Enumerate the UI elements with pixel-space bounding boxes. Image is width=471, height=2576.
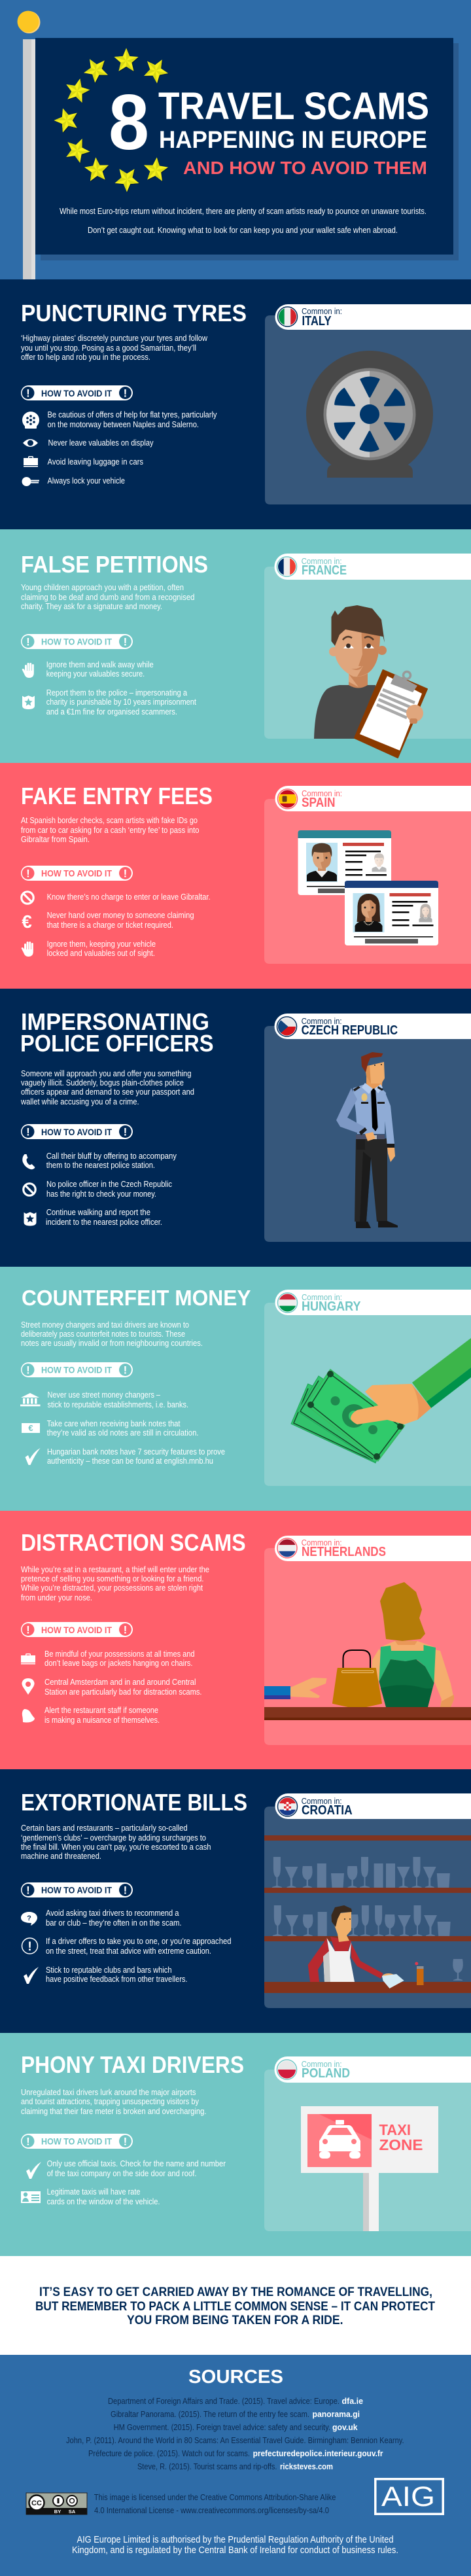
heading: POLICE OFFICERS — [20, 1030, 213, 1057]
creative commons badge: BY — [54, 2509, 61, 2514]
tip: taxi drivers: bar or club – they’re often in on the scam. — [46, 1918, 182, 1928]
tip: security features — [25, 1447, 225, 1466]
tip: caution — [22, 1937, 232, 1956]
description — [21, 816, 200, 844]
tip: report: Report them to the police – impersonating a — [46, 688, 187, 697]
tip: security features: Hungarian bank notes have 7 security features to prove — [47, 1447, 225, 1456]
common in badge: France: FRANCE — [302, 563, 347, 578]
icon: question bubble: ? — [27, 1914, 31, 1922]
description: deliberately pass counterfeit notes to tourists. These — [21, 1330, 185, 1339]
description: Certain bars and restaurants – particularly so-called — [21, 1824, 188, 1833]
common in badge: Netherlands: Common in: — [302, 1538, 342, 1547]
how to avoid it pill: HOW TO AVOID IT — [41, 2136, 112, 2146]
icon: taxi — [319, 2120, 360, 2159]
AIG logo — [375, 2479, 443, 2514]
icon: prohibited — [22, 892, 33, 904]
section background — [0, 529, 471, 763]
common in badge: Poland: Common in: — [302, 2059, 342, 2069]
tip: bank notes: they’re valid as old notes are still in circulation. — [47, 1428, 198, 1438]
tip: ignore — [22, 660, 154, 679]
section background — [0, 989, 471, 1267]
how to avoid it pill: ! — [26, 636, 30, 648]
tip: alert staff: Alert the restaurant staff if someone — [44, 1706, 158, 1715]
illustration: wheel — [306, 351, 433, 478]
tip: no right to check: has the right to check your money. — [46, 1190, 156, 1199]
section: counterfeit money — [0, 1267, 471, 1511]
common in badge: Spain — [275, 786, 471, 811]
heading: COUNTERFEIT MONEY — [22, 1286, 251, 1310]
closing message: BUT REMEMBER TO PACK A LITTLE COMMON SENSE – IT CAN PROTECT — [35, 2300, 435, 2314]
common in badge: Poland — [275, 2056, 471, 2083]
how to avoid it pill: ! — [124, 1884, 127, 1896]
tip: valuables: Never leave valuables on display — [48, 438, 154, 448]
closing message — [35, 2285, 435, 2327]
icon: police badge — [24, 1212, 37, 1226]
tip: call bluff — [22, 1152, 177, 1170]
sources list: John, P. (2011). Around the World in 80 Scams: An Essential Travel Guide. Birmingham: Bennion Kearny. — [66, 2435, 404, 2445]
tip: report: and a €1m fine for organised scammers. — [46, 707, 177, 716]
sources list: ricksteves.com — [280, 2462, 333, 2471]
licence text: This image is licensed under the Creative Commons Attribution-Share Alike — [94, 2492, 336, 2502]
heading: EXTORTIONATE BILLS — [21, 1789, 247, 1816]
illustration: police officer — [336, 1052, 398, 1228]
how to avoid it pill: HOW TO AVOID IT — [41, 1884, 112, 1895]
common in badge: Italy — [275, 304, 471, 330]
description — [21, 1320, 203, 1348]
icon: police badge — [22, 696, 35, 709]
tip: flat tyres: Be cautious of offers of help for flat tyres, particularly — [47, 410, 217, 419]
tip: alert staff — [22, 1706, 160, 1725]
common in badge: Netherlands: NETHERLANDS — [302, 1545, 386, 1559]
tip: official taxis — [26, 2159, 226, 2179]
sources list: Gibraltar Panorama. (2015). The return of the entry fee scam. — [111, 2409, 309, 2419]
licence text — [94, 2492, 336, 2515]
description: While you’re distracted, your possessions are stolen right — [21, 1583, 203, 1593]
tip: location: Station are particularly bad for distraction scams. — [44, 1687, 201, 1697]
illustration panel — [264, 1303, 471, 1486]
tip: no charge: Know there’s no charge to enter or leave Gibraltar. — [47, 892, 211, 902]
heading: PUNCTURING TYRES — [21, 300, 247, 326]
common in badge: Croatia: CROATIA — [302, 1803, 353, 1818]
sources list: HM Government. (2015). Foreign travel advice: safety and security. — [114, 2422, 330, 2432]
icon: check — [24, 1967, 39, 1984]
creative commons badge — [26, 2493, 87, 2514]
icon: prohibited — [24, 1184, 35, 1195]
tip: security features: authenticity – these can be found at english.mnb.hu — [47, 1456, 213, 1466]
common in badge: Netherlands — [275, 1536, 471, 1561]
how to avoid it pill — [21, 385, 133, 400]
flag: Poland — [277, 2060, 297, 2079]
icon: warning circle — [22, 1938, 38, 1954]
how to avoid it pill: ! — [26, 387, 30, 399]
icon: check — [25, 1448, 41, 1465]
tip: possessions — [21, 1650, 195, 1668]
section background — [0, 1267, 471, 1511]
tip: no right to check: No police officer in the Czech Republic — [46, 1180, 172, 1189]
tip: never pay — [22, 911, 194, 932]
description: pretence of selling you something or looking for a friend. — [21, 1574, 204, 1583]
common in badge: Hungary — [275, 1290, 471, 1315]
licence text: 4.0 International License - www.creativecommons.org/licenses/by-sa/4.0 — [94, 2505, 329, 2515]
heading: IMPERSONATING — [21, 1008, 209, 1035]
heading: PHONY TAXI DRIVERS — [21, 2051, 244, 2078]
tip: rate cards: Legitimate taxis will have rate — [47, 2187, 141, 2197]
description: you until you stop. Posing as a good Samaritan, they’ll — [21, 344, 196, 353]
common in badge: Croatia: Common in: — [302, 1796, 342, 1806]
tip: no right to check — [24, 1180, 172, 1199]
sources list: Department of Foreign Affairs and Trade. (2015). Travel advice: Europe. — [108, 2396, 340, 2406]
icon: bell — [22, 1709, 35, 1722]
common in badge: Czech Republic: Common in: — [302, 1016, 342, 1026]
tip: caution: If a driver offers to take you to one, or you’re approached — [46, 1937, 232, 1946]
closing message: YOU FROM BEING TAKEN FOR A RIDE. — [127, 2314, 343, 2327]
tip: lock vehicle — [22, 476, 125, 486]
tip: bank notes — [22, 1419, 199, 1438]
tip: no charge — [22, 892, 211, 904]
sources list: prefecturedepolice.interieur.gouv.fr — [253, 2449, 383, 2458]
flag: Netherlands — [277, 1538, 297, 1558]
tip: taxi drivers: Avoid asking taxi drivers to recommend a — [46, 1909, 179, 1918]
how to avoid it pill — [21, 1622, 133, 1637]
legal text: Kingdom, and is regulated by the Central Bank of Ireland for conduct of business rules. — [72, 2545, 398, 2556]
tip: never pay: that there is a charge or ticket required. — [47, 921, 173, 930]
icon: hand — [21, 942, 33, 957]
tip: banks: Never use street money changers – — [47, 1390, 160, 1400]
illustration: bartender — [264, 1905, 471, 1993]
description: from under your nose. — [21, 1593, 92, 1602]
tip: banks: stick to reputable establishments, i.e. banks. — [47, 1400, 188, 1409]
tip: ignore: locked and valuables out of sight. — [47, 949, 155, 958]
creative commons badge: CC — [31, 2499, 42, 2507]
icon: euro note: € — [28, 1423, 33, 1433]
illustration: taxi zone sign: TAXI — [379, 2121, 411, 2138]
how to avoid it pill: HOW TO AVOID IT — [41, 868, 112, 878]
common in badge: Italy: Common in: — [302, 306, 342, 316]
description: charity. They ask for a signature and money. — [21, 602, 162, 611]
illustration: taxi zone sign — [301, 2106, 438, 2231]
icon: ID card — [21, 2191, 41, 2203]
tip: report: Continue walking and report the — [46, 1208, 150, 1217]
creative commons badge: SA — [69, 2509, 76, 2514]
description: Unregulated taxi drivers lurk around the major airports — [21, 2088, 196, 2097]
common in badge: Italy: ITALY — [302, 314, 332, 328]
icon: eye — [23, 439, 38, 447]
section background — [0, 1769, 471, 2033]
tip: possessions: Be mindful of your possessions at all times and — [44, 1650, 195, 1659]
section background — [0, 1511, 471, 1769]
sources list: gov.uk — [332, 2423, 358, 2432]
flag: Croatia — [277, 1797, 297, 1816]
illustration panel — [264, 799, 471, 964]
tip: ignore: Ignore them and walk away while — [46, 660, 154, 669]
tip: flat tyres — [22, 410, 217, 429]
main title: TRAVEL SCAMS — [158, 85, 429, 128]
icon: briefcase — [24, 456, 38, 467]
how to avoid it pill: ! — [124, 2136, 127, 2147]
sources list: Préfecture de police. (2015). Watch out for scams. — [88, 2448, 250, 2458]
how to avoid it pill — [21, 634, 133, 649]
common in badge: Czech Republic — [275, 1014, 471, 1039]
description: claiming that their fare meter is broken and overcharging. — [21, 2107, 207, 2116]
tip: call bluff: them to the nearest police station. — [46, 1161, 155, 1170]
sources list — [66, 2396, 404, 2471]
how to avoid it pill: ! — [124, 1624, 127, 1636]
section: fake entry fees — [0, 763, 471, 989]
tip: call bluff: Call their bluff by offering to accompany — [46, 1152, 177, 1161]
section background — [0, 279, 471, 529]
header background — [0, 0, 471, 279]
how to avoid it pill — [21, 1124, 133, 1139]
main title — [109, 79, 429, 178]
section background — [0, 2033, 471, 2256]
legal text — [72, 2534, 398, 2556]
how to avoid it pill — [21, 1882, 133, 1897]
illustration panel — [265, 315, 471, 504]
main title: HAPPENING IN EUROPE — [159, 126, 427, 153]
common in badge: Croatia — [275, 1793, 471, 1819]
description: Street money changers and taxi drivers are known to — [21, 1320, 189, 1330]
sources list: panorama.gi — [313, 2410, 360, 2419]
tip: ignore: keeping your valuables secure. — [46, 669, 145, 679]
heading: FALSE PETITIONS — [21, 551, 208, 578]
tip: flat tyres: on the motorway between Naples and Salerno. — [47, 420, 199, 429]
common in badge: France — [275, 554, 471, 580]
description: officers appear and demand to see your passport and — [21, 1087, 194, 1097]
section background — [0, 763, 471, 989]
common in badge: Poland: POLAND — [302, 2066, 350, 2081]
heading — [20, 1008, 213, 1057]
sources heading: SOURCES — [188, 2367, 283, 2388]
description: Gibraltar from Spain. — [21, 835, 90, 844]
tip: never pay: Never hand over money to someone claiming — [47, 911, 194, 920]
how to avoid it pill: ! — [124, 1125, 127, 1138]
icon: euro note — [22, 1423, 40, 1433]
description: At Spanish border checks, scam artists with fake IDs go — [21, 816, 198, 825]
footer panel — [0, 2355, 471, 2576]
how to avoid it pill: ! — [26, 2136, 30, 2147]
description — [20, 1069, 194, 1106]
section: puncturing tyres — [0, 279, 471, 529]
tip: luggage: Avoid leaving luggage in cars — [47, 457, 143, 467]
description: ‘Highway pirates’ discretely puncture your tyres and follow — [21, 334, 208, 343]
how to avoid it pill — [21, 1362, 133, 1377]
description: claiming to be deaf and dumb and from a recognised — [21, 593, 195, 602]
sources list: Steve, R. (2015). Tourist scams and rip-offs. — [137, 2461, 277, 2471]
description — [21, 1824, 211, 1861]
flag panel — [35, 38, 453, 255]
description: offer to help and rob you in the process. — [21, 353, 150, 362]
tip: location: Central Amsterdam and in and around Central — [44, 1678, 196, 1687]
common in badge: Hungary: Common in: — [302, 1292, 342, 1302]
main title: 8 — [109, 79, 149, 166]
tip: reputable clubs: Stick to reputable clubs and bars which — [46, 1966, 172, 1975]
description: and tourist attractions, trapping unsuspecting visitors by — [21, 2097, 200, 2106]
description: Young children approach you with a petition, often — [21, 583, 184, 592]
how to avoid it pill: HOW TO AVOID IT — [41, 1625, 112, 1635]
how to avoid it pill — [21, 2134, 133, 2149]
description: wallet while accusing you of a crime. — [20, 1097, 139, 1106]
tip: official taxis: Only use official taxis. Check for the name and number — [47, 2159, 226, 2168]
illustration: ID card man — [298, 830, 391, 895]
how to avoid it pill: HOW TO AVOID IT — [41, 1365, 112, 1375]
closing message: IT’S EASY TO GET CARRIED AWAY BY THE ROMANCE OF TRAVELLING, — [39, 2285, 432, 2299]
illustration: hand with banknotes — [291, 1338, 471, 1463]
description — [21, 2088, 207, 2116]
tip: lock vehicle: Always lock your vehicle — [47, 476, 125, 485]
flag: France — [277, 557, 297, 576]
icon: warning circle: ! — [27, 1940, 32, 1954]
illustration panel — [264, 1807, 471, 2008]
tip: alert staff: is making a nuisance of themselves. — [44, 1716, 160, 1725]
icon: question bubble — [21, 1912, 37, 1926]
icon: phone — [22, 1154, 35, 1169]
common in badge: Hungary: HUNGARY — [302, 1299, 361, 1314]
tip: caution: on the street, treat that advice with extreme caution. — [46, 1947, 211, 1956]
icon: hand — [22, 663, 34, 678]
illustration panel — [264, 2070, 471, 2231]
description: While you’re sat in a restaurant, a thief will enter under the — [21, 1565, 209, 1574]
intro text — [60, 207, 427, 235]
section: phony taxi drivers — [0, 2033, 471, 2256]
flag shadow — [41, 43, 459, 260]
icon: tyre — [22, 412, 39, 429]
illustration: restaurant woman and thief — [264, 1582, 471, 1720]
description — [21, 1565, 209, 1602]
tip: official taxis: of the taxi company on the side door and roof. — [47, 2169, 196, 2178]
flag: Czech Republic — [277, 1017, 297, 1036]
section: extortionate bills — [0, 1769, 471, 2033]
section: false petitions — [0, 529, 471, 763]
tip: rate cards — [21, 2187, 160, 2206]
tip: rate cards: cards on the window of the vehicle. — [47, 2197, 160, 2206]
illustration panel — [264, 1026, 471, 1242]
icon: key — [22, 477, 39, 486]
how to avoid it pill: HOW TO AVOID IT — [41, 388, 112, 398]
icon: euro: € — [22, 911, 32, 932]
how to avoid it pill: ! — [26, 1884, 30, 1896]
common in badge: Spain: Common in: — [302, 788, 342, 798]
tip: report: incident to the nearest police officer. — [46, 1218, 162, 1227]
how to avoid it pill: ! — [26, 1624, 30, 1636]
common in badge: Spain: SPAIN — [302, 796, 335, 810]
description: notes are usually invalid or from neighbouring countries. — [21, 1339, 203, 1348]
icon: bank — [20, 1393, 41, 1406]
icon: check — [26, 2162, 41, 2179]
how to avoid it pill — [21, 866, 133, 881]
how to avoid it pill: ! — [124, 1364, 127, 1377]
heading: FAKE ENTRY FEES — [21, 783, 213, 809]
footer background — [0, 2355, 471, 2576]
illustration: ID card woman — [345, 881, 438, 945]
intro text: Don’t get caught out. Knowing what to look for can keep you and your wallet safe when abroad. — [88, 226, 398, 235]
section: impersonating police officers — [0, 989, 471, 1267]
legal text: AIG Europe Limited is authorised by the Prudential Regulation Authority of the United — [77, 2534, 394, 2545]
tip: bank notes: Take care when receiving bank notes that — [47, 1419, 181, 1428]
how to avoid it pill: HOW TO AVOID IT — [41, 636, 112, 646]
common in badge: Czech Republic: CZECH REPUBLIC — [302, 1023, 398, 1038]
tip: report: charity is punishable by 10 years imprisonment — [46, 697, 196, 707]
how to avoid it pill: ! — [26, 1125, 30, 1138]
how to avoid it pill: ! — [26, 868, 30, 879]
how to avoid it pill: HOW TO AVOID IT — [41, 1127, 112, 1137]
illustration panel — [264, 567, 471, 739]
tip: report — [24, 1208, 162, 1227]
main title: AND HOW TO AVOID THEM — [183, 158, 427, 178]
how to avoid it pill: ! — [26, 1364, 30, 1377]
tip: reputable clubs — [24, 1966, 187, 1984]
description — [21, 334, 208, 362]
EU stars ring — [54, 48, 173, 192]
description: machine and threatened. — [21, 1852, 101, 1861]
illustration panel — [264, 1548, 471, 1745]
tip: possessions: don’t leave bags or jackets hanging on chairs. — [44, 1659, 192, 1668]
how to avoid it pill: ! — [124, 636, 127, 648]
icon: map pin — [22, 1678, 35, 1695]
AIG logo: AIG — [381, 2481, 435, 2513]
illustration: bar shelves and glasses — [264, 1835, 471, 1981]
tip: location — [22, 1678, 202, 1697]
flag: Hungary — [277, 1293, 297, 1313]
tip: reputable clubs: have positive feedback from other travellers. — [46, 1975, 187, 1984]
tip: banks — [20, 1390, 188, 1409]
section: distraction scams — [0, 1511, 471, 1769]
description: from car to car asking for a cash ‘entry fee’ to pass into — [21, 826, 200, 835]
intro text: While most Euro-trips return without incident, there are plenty of scam artists ready to pounce on unaware tourists. — [60, 207, 427, 216]
description — [21, 583, 195, 611]
tip: ignore — [21, 940, 156, 958]
heading: DISTRACTION SCAMS — [21, 1529, 246, 1556]
illustration: taxi zone sign: ZONE — [379, 2136, 423, 2153]
tip: luggage — [24, 456, 143, 467]
common in badge: France: Common in: — [302, 556, 342, 566]
flag: Italy — [277, 307, 297, 326]
description: Someone will approach you and offer you something — [21, 1069, 192, 1078]
description: vaguely illicit. Suddenly, bogus plain-clothes police — [21, 1078, 184, 1087]
how to avoid it pill: ! — [124, 868, 127, 879]
sources list: dfa.ie — [341, 2397, 363, 2406]
tip: taxi drivers — [21, 1909, 182, 1928]
tip: ignore: Ignore them, keeping your vehicle — [47, 940, 156, 949]
description: ‘gentlemen’s clubs’ – overcharge by adding surcharges to — [21, 1833, 206, 1843]
tip: report — [22, 688, 196, 716]
icon: briefcase — [21, 1653, 35, 1665]
flag: Spain — [277, 789, 297, 809]
flag pole — [17, 10, 41, 279]
illustration: petitioner — [314, 605, 427, 758]
description: the final bill. When you can’t pay, you’re escorted to a cash — [21, 1843, 211, 1852]
how to avoid it pill: ! — [124, 387, 127, 399]
